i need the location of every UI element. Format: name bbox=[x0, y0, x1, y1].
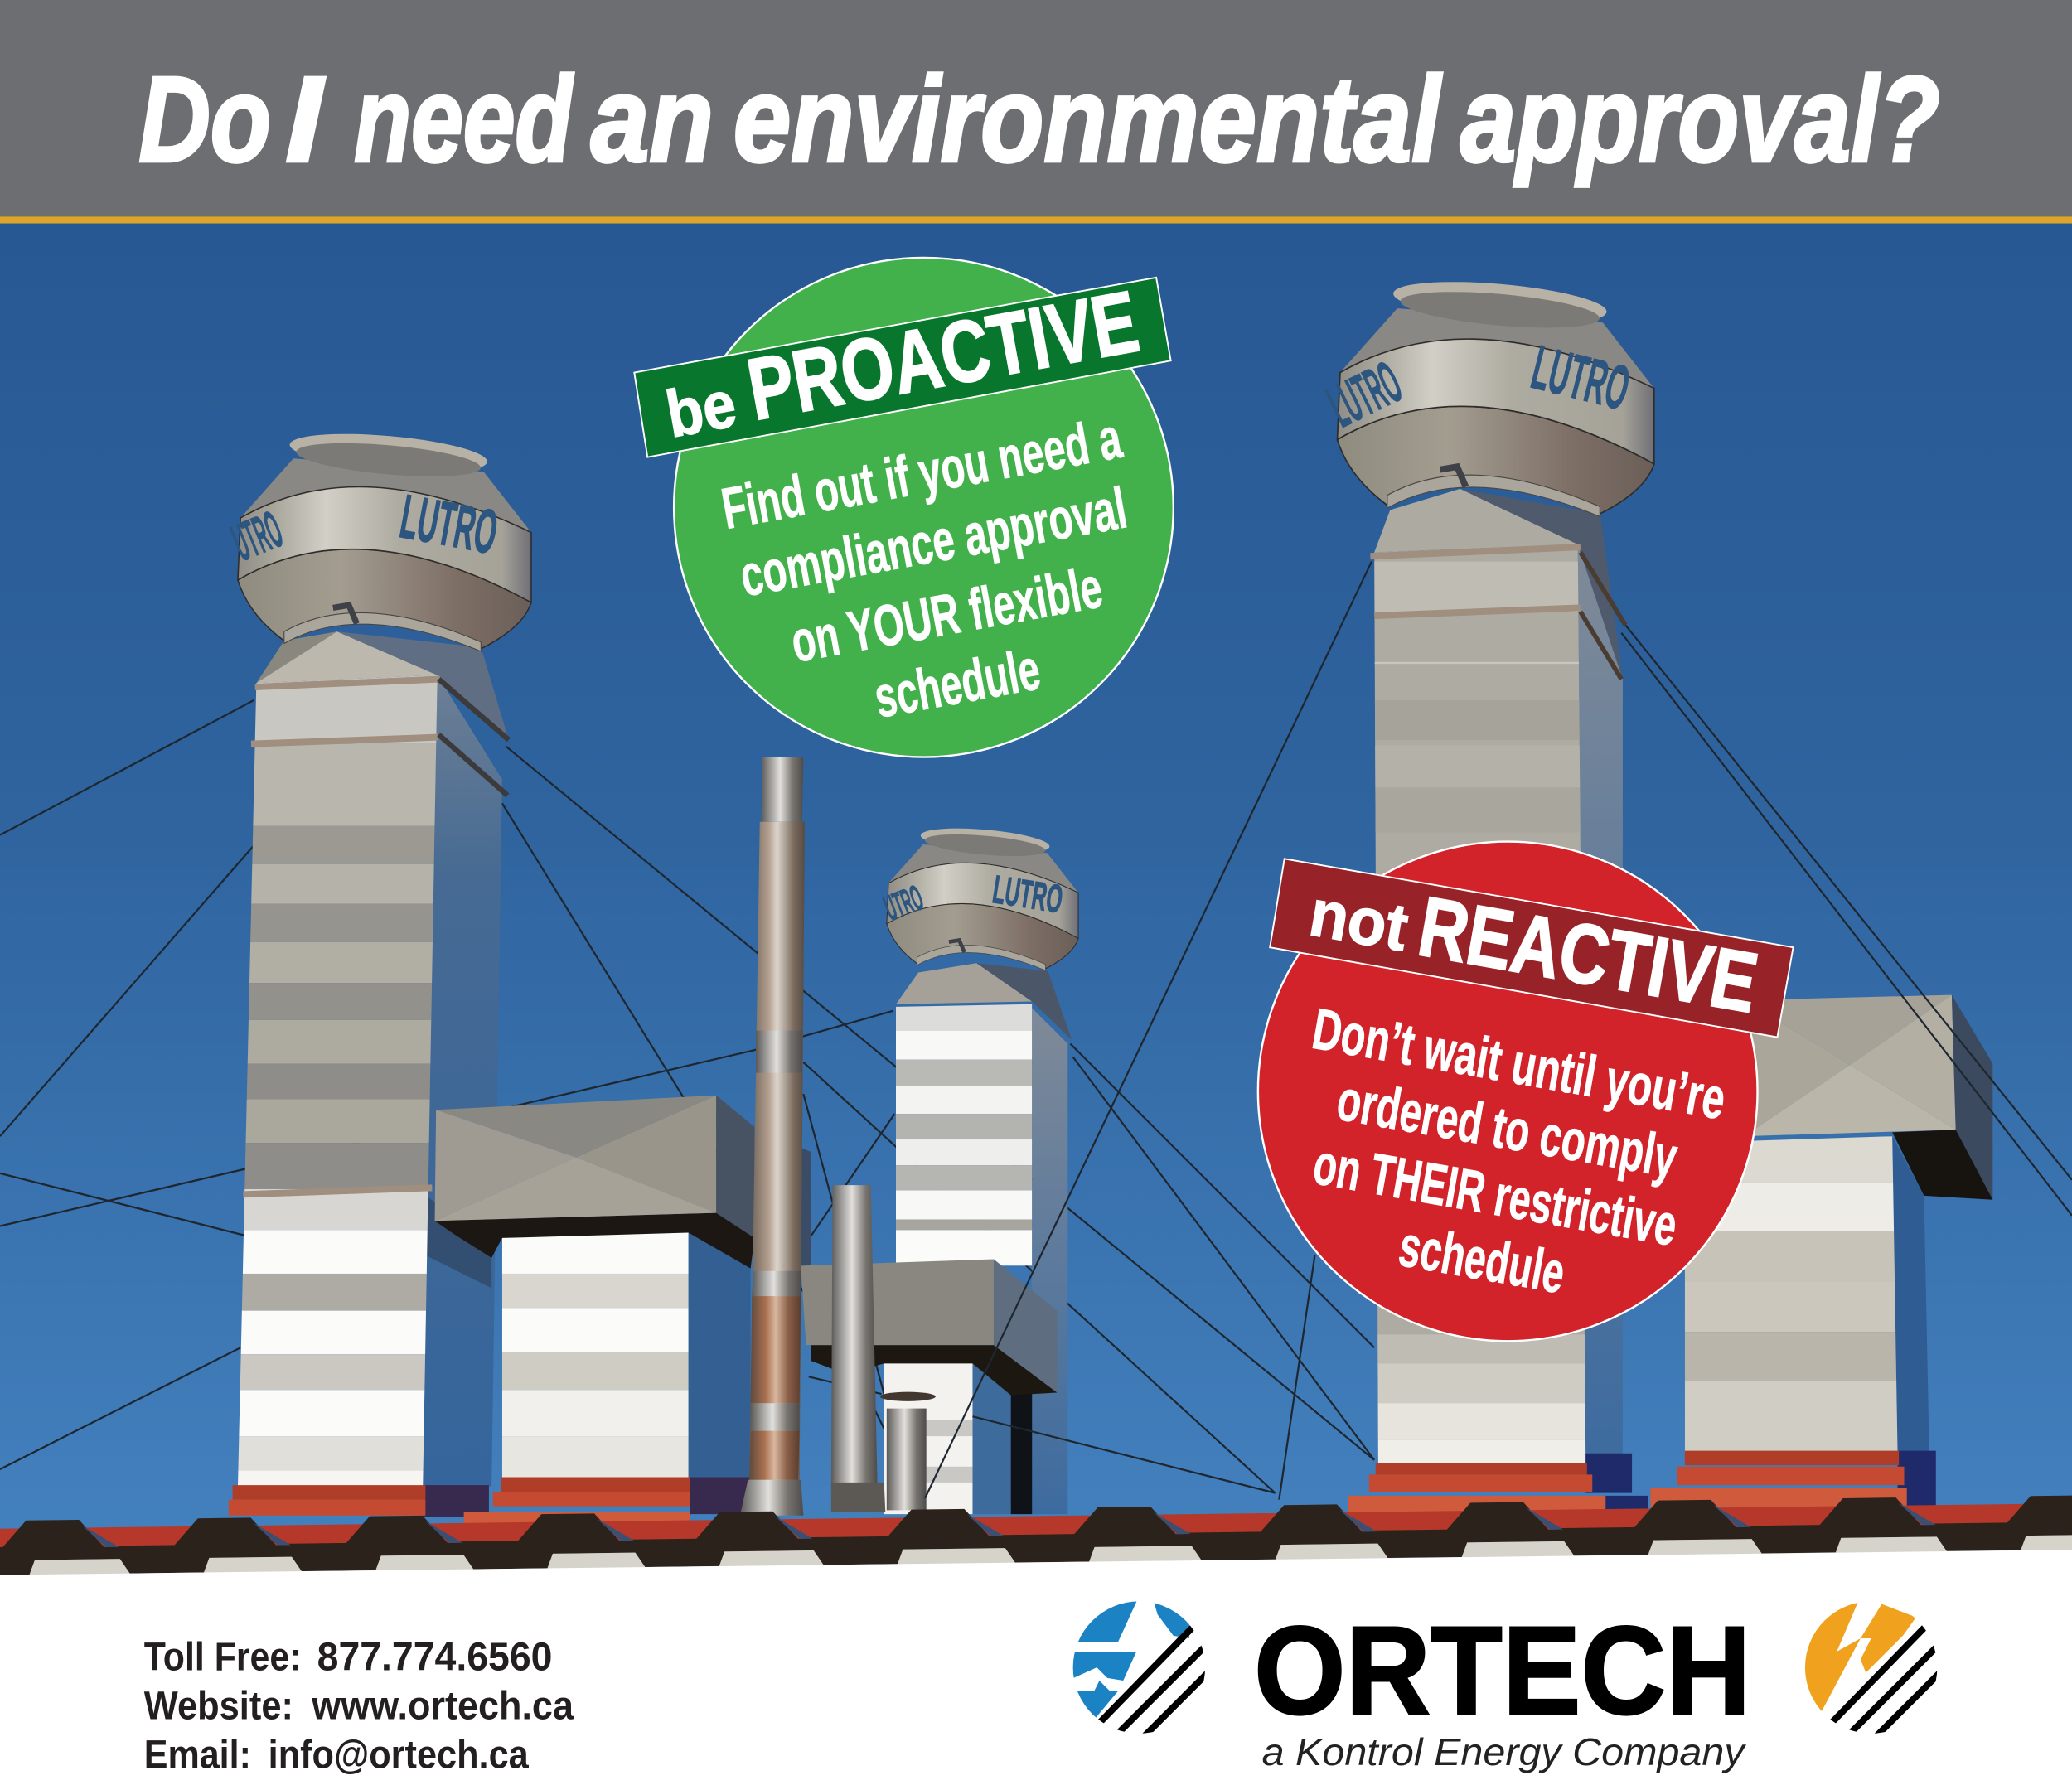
reactive message: on THEIR restrictive bbox=[1309, 1130, 1682, 1258]
photo: corrugated red roof bbox=[0, 1493, 2072, 1583]
title: environmental bbox=[733, 52, 1443, 188]
logo wordmark: ORTECH: ORTECH bbox=[1254, 1601, 1751, 1741]
proactive message: schedule bbox=[869, 636, 1045, 730]
icon: left rotating vent head with LUTRO label: LUTRO bbox=[395, 481, 503, 567]
photo background: blue sky bbox=[0, 223, 2072, 1584]
contact details: Toll Free: bbox=[144, 1635, 302, 1679]
icon: right rotating vent head with LUTRO label bbox=[1319, 275, 1654, 516]
contact details: info@ortech.ca bbox=[269, 1733, 529, 1777]
photo: centre duct with vent head: LUTRO bbox=[990, 868, 1066, 922]
guy wires behind the ducts bbox=[0, 700, 1374, 1507]
reactive message: schedule bbox=[1395, 1212, 1570, 1305]
banner: be PROACTIVE bbox=[634, 273, 1171, 457]
callout: be PROACTIVE bbox=[634, 258, 1174, 757]
header rule bbox=[0, 216, 2072, 223]
photo: tall chimney pipe bbox=[740, 757, 805, 1516]
contact details bbox=[144, 1635, 574, 1777]
header band bbox=[0, 0, 2072, 216]
reactive message bbox=[1308, 995, 1731, 1305]
icon: left rotating vent head with LUTRO label: UTRO bbox=[224, 499, 290, 573]
banner: be PROACTIVE: PROACTIVE bbox=[741, 273, 1145, 439]
photo: left hooded duct bbox=[435, 1096, 811, 1526]
icon: right rotating vent head with LUTRO label: LUTRO bbox=[1319, 349, 1411, 440]
photo: right hooded duct bbox=[1650, 995, 1992, 1509]
icon: blue water logo mark bbox=[1072, 1601, 1205, 1734]
proactive message: Find out if you need a bbox=[717, 404, 1126, 541]
photo: centre duct with vent head: UTRO bbox=[879, 878, 928, 929]
title: I bbox=[285, 52, 326, 188]
green circle bbox=[674, 258, 1174, 757]
proactive message bbox=[717, 404, 1131, 730]
reactive message: ordered to comply bbox=[1333, 1067, 1682, 1190]
title: an bbox=[591, 52, 714, 188]
title: need bbox=[354, 52, 574, 188]
guy wires in front of the ducts bbox=[925, 562, 2072, 1500]
icon: left rotating vent head with LUTRO label bbox=[224, 428, 531, 651]
icon: orange lightning logo mark bbox=[1805, 1603, 1938, 1734]
red circle bbox=[1258, 842, 1758, 1341]
contact details: Email: bbox=[144, 1733, 251, 1777]
logo tagline: a Kontrol Energy Company bbox=[1262, 1730, 1747, 1773]
reactive message: Don’t wait until you’re bbox=[1308, 995, 1731, 1131]
banner: be PROACTIVE: be bbox=[661, 366, 742, 451]
photo: right tall duct bbox=[1348, 489, 1648, 1514]
icon: right rotating vent head with LUTRO label: LUTRO bbox=[1525, 332, 1636, 424]
contact details: 877.774.6560 bbox=[317, 1635, 552, 1679]
title bbox=[138, 52, 1940, 188]
proactive message: compliance approval bbox=[735, 474, 1131, 609]
callout: not REACTIVE bbox=[1258, 842, 1794, 1341]
contact details: www.ortech.ca bbox=[311, 1684, 574, 1728]
banner: not REACTIVE: not bbox=[1305, 875, 1413, 965]
title: approval? bbox=[1460, 52, 1940, 188]
banner: not REACTIVE bbox=[1270, 859, 1794, 1038]
proactive message: on YOUR flexible bbox=[786, 554, 1107, 675]
white footer panel bbox=[0, 1550, 2072, 1785]
photo: centre duct with vent head bbox=[801, 824, 1078, 1514]
title: Do bbox=[138, 52, 271, 188]
banner: not REACTIVE: REACTIVE bbox=[1412, 879, 1765, 1031]
contact details: Website: bbox=[144, 1684, 293, 1728]
photo: left tall duct bbox=[225, 631, 509, 1517]
photo: short pipes bbox=[831, 1185, 936, 1512]
